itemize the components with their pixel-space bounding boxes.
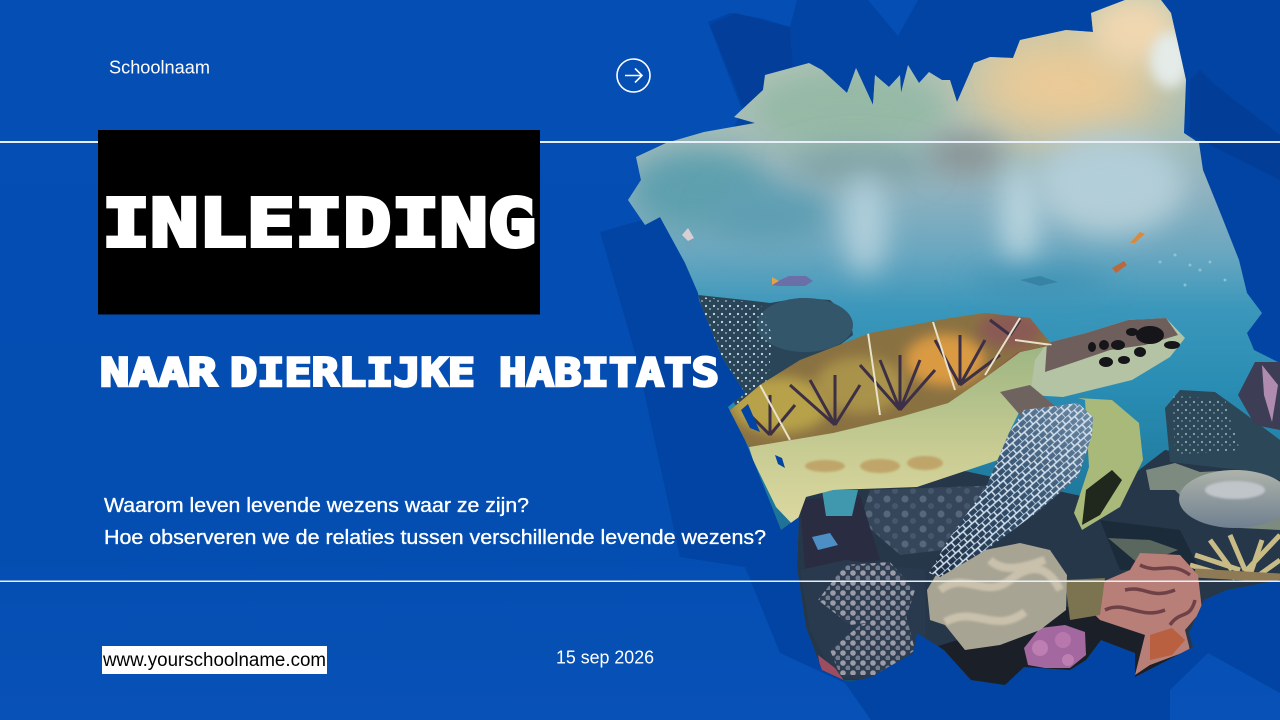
icon: arrow in circle: [617, 59, 650, 92]
right rock and pink soft coral: [1165, 362, 1280, 480]
plate coral: [1146, 463, 1280, 530]
shoulder: [1000, 385, 1060, 415]
dark reef mass: [790, 450, 1280, 680]
date: 15 sep 2026: [556, 648, 654, 668]
head scales: [1088, 326, 1180, 367]
left rock coral: [698, 295, 853, 405]
staghorn coral: [1190, 535, 1280, 578]
small fish: [682, 228, 1145, 286]
photo: sea turtle on coral reef: [620, 0, 1280, 700]
front flipper: [929, 403, 1093, 577]
body questions: Hoe observeren we de relaties tussen verschillende levende wezens?: [104, 527, 766, 549]
plastron: [749, 345, 1052, 527]
shell seams: [760, 318, 1052, 440]
body questions: [104, 495, 766, 549]
bottom divider line: [0, 580, 1280, 582]
subtitle: NAAR: [100, 351, 218, 396]
subtitle: HABITATS: [499, 351, 719, 396]
title text: INLEIDING: [102, 185, 536, 262]
school name: Schoolnaam: [109, 58, 210, 78]
sea turtle: [720, 300, 1185, 577]
scutes on underside: [805, 456, 943, 473]
beige brain coral: [927, 543, 1067, 650]
underwater backdrop: [620, 0, 1280, 700]
pink brain coral: [1065, 553, 1202, 675]
subtitle: [100, 351, 719, 396]
neck and head: [1030, 318, 1185, 397]
water gaps along turtle edge: [741, 404, 785, 468]
top divider line: [0, 141, 1280, 143]
website tag: www.yourschoolname.com: [102, 650, 326, 671]
subtitle: DIERLIJKE: [230, 351, 475, 396]
shell radiating marks: [745, 320, 1020, 435]
branching coral, bottom left: [800, 560, 925, 682]
body questions: Waarom leven levende wezens waar ze zijn?: [104, 495, 529, 517]
lower reef shade: [938, 606, 1191, 685]
carapace: [730, 313, 1052, 447]
title block: [98, 130, 540, 314]
purple coral: [1024, 625, 1086, 668]
rear flipper: [1074, 398, 1143, 530]
water specks: [1158, 254, 1226, 286]
shell colour patches: [730, 312, 1042, 433]
